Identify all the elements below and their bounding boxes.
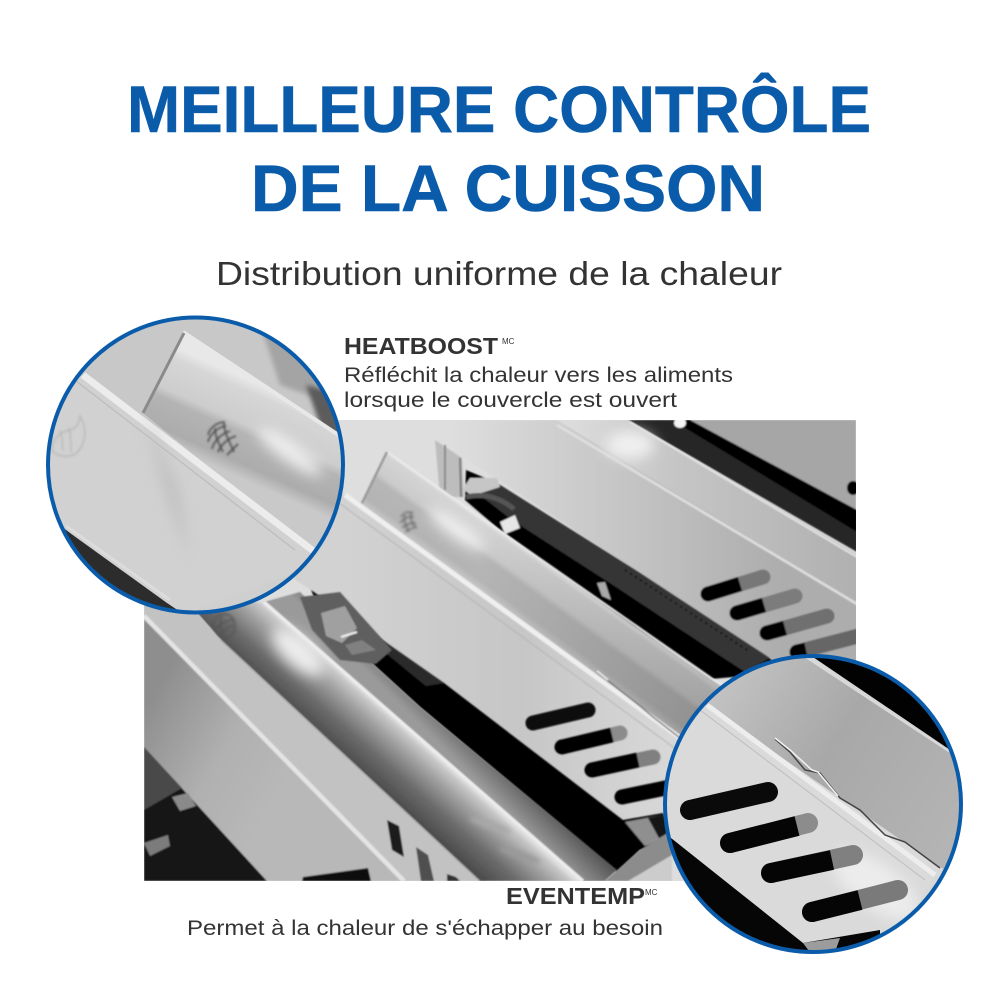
bracket and near burner — [435, 440, 790, 680]
text block: EvenTemp: Permet à la chaleur de s'échapper au besoin — [187, 917, 663, 940]
lower black area — [670, 838, 880, 950]
upper black area — [814, 658, 948, 749]
gray tube at bottom right — [605, 830, 672, 881]
photo: grill burners and heat plates — [144, 418, 862, 881]
back plate with slots — [509, 420, 856, 660]
upper plate channel — [143, 336, 340, 518]
title — [127, 72, 871, 225]
icon: flame logo on middle plate — [400, 512, 417, 532]
front plate face — [144, 605, 480, 881]
seam with jagged edge — [775, 738, 940, 868]
middle plate — [294, 451, 722, 819]
lower tube — [64, 528, 176, 610]
gray upper panel — [706, 655, 965, 880]
subtitle: Distribution uniforme de la chaleur — [216, 255, 782, 292]
shadow gap — [311, 590, 672, 872]
back structure — [260, 334, 338, 432]
front plate channel — [190, 602, 583, 881]
icon: flame logo on front plate — [213, 614, 235, 638]
text block: EvenTemp — [187, 883, 663, 940]
callout circle: EvenTemp close-up — [660, 655, 965, 960]
title: DE LA CUISSON — [251, 151, 765, 225]
text block: HeatBoost — [344, 333, 733, 412]
middle plate slots — [533, 710, 680, 797]
text block: EvenTemp: EVENTEMP — [506, 883, 645, 909]
text block: HeatBoost: HEATBOOST — [344, 333, 498, 359]
lower gray strip and clip — [264, 592, 617, 881]
slots — [690, 792, 898, 922]
text block: EvenTemp: MC — [645, 888, 658, 897]
icon: flame logo dark — [208, 422, 238, 455]
text block: HeatBoost: MC — [502, 337, 515, 346]
far burner — [628, 418, 859, 552]
callout circle: HeatBoost close-up — [40, 310, 350, 625]
text block: HeatBoost: lorsque le couvercle est ouvert — [344, 389, 677, 412]
text block: HeatBoost: Réfléchit la chaleur vers les aliments — [344, 364, 733, 387]
title: MEILLEURE CONTRÔLE — [127, 72, 871, 146]
face plate — [660, 705, 940, 943]
icon: flame logo faint — [53, 416, 85, 456]
face panel — [52, 375, 144, 440]
